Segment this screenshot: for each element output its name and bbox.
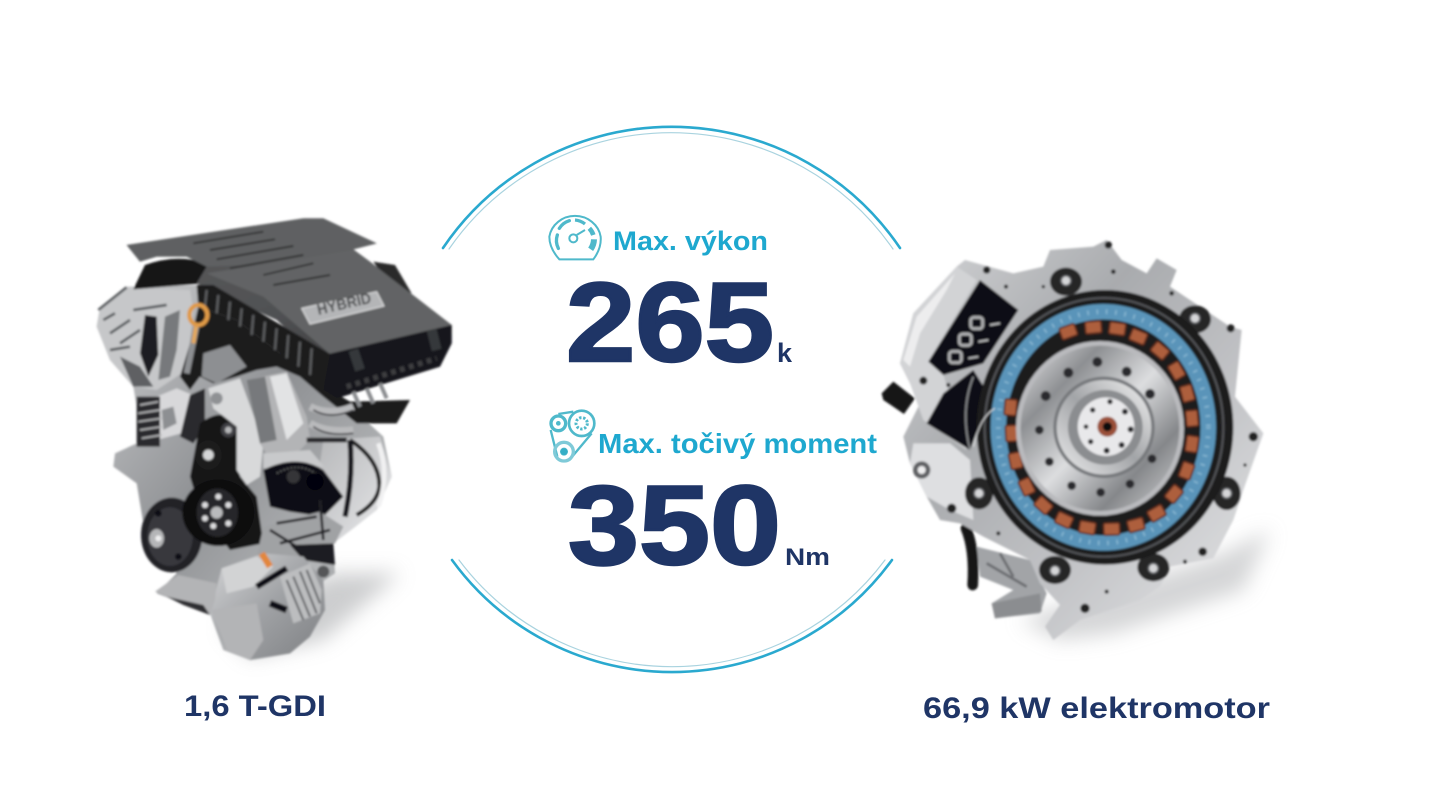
- connector: [882, 382, 915, 414]
- lower casing: [257, 512, 343, 557]
- cover underside details: [353, 383, 387, 407]
- coolant pipes: [307, 407, 353, 440]
- lower casting: [977, 547, 1047, 618]
- label: 1,6 T-GDI: 1,6 T-GDI: [184, 690, 326, 723]
- number: 350 Nm: Nm: [785, 544, 830, 571]
- water pump pulley: [182, 479, 254, 546]
- engine image: 1,6 T-GDI: [97, 218, 452, 660]
- mounting lugs: [965, 268, 1241, 584]
- crank pulley: [141, 498, 202, 572]
- idler pulley: [195, 423, 236, 470]
- compressor housing: [247, 372, 310, 460]
- spring mount dark backdrop: [137, 397, 160, 447]
- lug bolts: [974, 276, 1232, 576]
- heading: Max. výkon: Max. výkon: [613, 226, 768, 256]
- icon: speedometer: [549, 216, 601, 259]
- blue winding band: [998, 312, 1208, 543]
- dark cavity: [927, 370, 990, 450]
- oil dipstick: [187, 305, 207, 373]
- number: 265 k: k: [777, 338, 793, 368]
- number: 350 Nm: 350: [568, 463, 781, 588]
- dark cavity under cover: [180, 307, 410, 423]
- right housing: [313, 437, 392, 543]
- left housing: [900, 267, 977, 450]
- silver mounting plate: [900, 240, 1263, 640]
- engine body: [97, 285, 392, 660]
- HYBRID badge: [302, 290, 384, 324]
- black stator ring: [977, 290, 1233, 565]
- plastic engine cover: [127, 218, 452, 398]
- central hub: [1053, 377, 1155, 478]
- white bracket: [153, 388, 197, 440]
- HYBRID badge: HYBRID: [315, 290, 373, 319]
- lower silver pipe: [263, 450, 330, 473]
- copper coils: [1004, 321, 1199, 535]
- rotor disc: [1016, 341, 1184, 516]
- cylinder head: [97, 287, 193, 390]
- heading: Max. točivý moment: Max. točivý moment: [598, 428, 877, 459]
- bracket arm: [208, 378, 263, 485]
- hose: [966, 528, 973, 585]
- electric motor image: 66,9 kW elektromotor: [882, 240, 1270, 640]
- terminal box: [928, 280, 1018, 375]
- label: 66,9 kW elektromotor: 66,9 kW elektromotor: [923, 692, 1270, 725]
- lower alternator: [210, 553, 329, 660]
- bottom arc: [452, 560, 892, 672]
- plate bolts: [919, 241, 1258, 613]
- belt and center dark: [190, 415, 263, 550]
- top-left dark manifold: [133, 259, 211, 289]
- mounting foot: [155, 575, 217, 615]
- rear flywheel ring: [345, 440, 384, 517]
- top arc: [443, 127, 900, 249]
- silver patch near dipstick: [202, 345, 247, 383]
- dark mechanism center: [263, 462, 343, 517]
- rear intake dark parts: [373, 262, 412, 293]
- icon: belt drive: [551, 411, 594, 461]
- number: 265 k: 265: [566, 260, 774, 385]
